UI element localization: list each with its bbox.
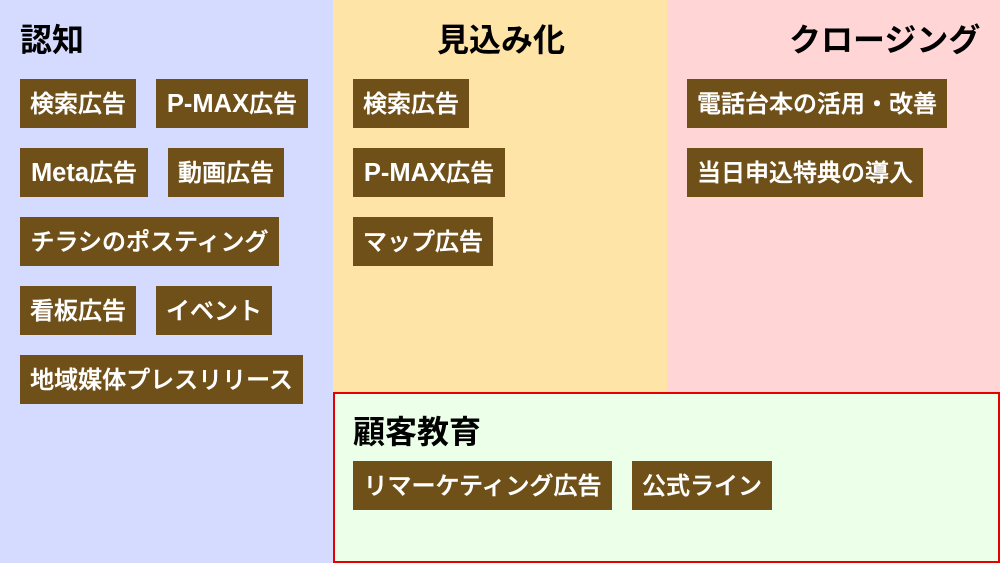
tag: 動画広告: 動画広告 xyxy=(178,160,274,187)
tag: 電話台本の活用・改善: 電話台本の活用・改善 xyxy=(697,91,937,118)
tag: P-MAX広告: P-MAX広告 xyxy=(364,159,494,187)
tag: 看板広告: 看板広告 xyxy=(30,298,126,325)
tag: 当日申込特典の導入 xyxy=(687,148,923,197)
tag: マップ広告: マップ広告 xyxy=(363,229,483,256)
tag: マップ広告 xyxy=(353,217,493,266)
tag: イベント xyxy=(156,286,272,335)
tag: 検索広告 xyxy=(353,79,469,128)
tag: 地域媒体プレスリリース xyxy=(20,355,303,404)
tag: Meta広告 xyxy=(20,148,148,197)
tag: P-MAX広告 xyxy=(353,148,505,197)
heading: 見込み化: 見込み化 xyxy=(437,22,565,58)
tag: リマーケティング広告: リマーケティング広告 xyxy=(363,473,602,500)
tag: P-MAX広告: P-MAX広告 xyxy=(167,90,297,118)
panel: 認知 xyxy=(0,0,333,563)
tag: 看板広告 xyxy=(20,286,136,335)
panel: 顧客教育 xyxy=(333,392,1000,563)
heading: 顧客教育: 顧客教育 xyxy=(353,414,481,450)
tag: チラシのポスティング: チラシのポスティング xyxy=(30,229,269,256)
panel: 見込み化 xyxy=(333,0,667,393)
tag: 検索広告: 検索広告 xyxy=(30,91,126,118)
heading: 認知: 認知 xyxy=(20,22,84,58)
tag: Meta広告: Meta広告 xyxy=(31,159,137,187)
tag: 公式ライン xyxy=(632,461,772,510)
tag: 検索広告 xyxy=(20,79,136,128)
heading: クロージング: クロージング xyxy=(789,22,980,58)
tag: 電話台本の活用・改善 xyxy=(687,79,947,128)
tag: 地域媒体プレスリリース: 地域媒体プレスリリース xyxy=(30,367,293,394)
tag: 検索広告: 検索広告 xyxy=(363,91,459,118)
tag: チラシのポスティング xyxy=(20,217,279,266)
tag: 公式ライン: 公式ライン xyxy=(642,473,762,500)
tag: P-MAX広告 xyxy=(156,79,308,128)
panel: クロージング xyxy=(667,0,1000,393)
tag: イベント: イベント xyxy=(166,298,262,325)
tag: リマーケティング広告 xyxy=(353,461,612,510)
tag: 当日申込特典の導入: 当日申込特典の導入 xyxy=(697,160,913,187)
tag: 動画広告 xyxy=(168,148,284,197)
